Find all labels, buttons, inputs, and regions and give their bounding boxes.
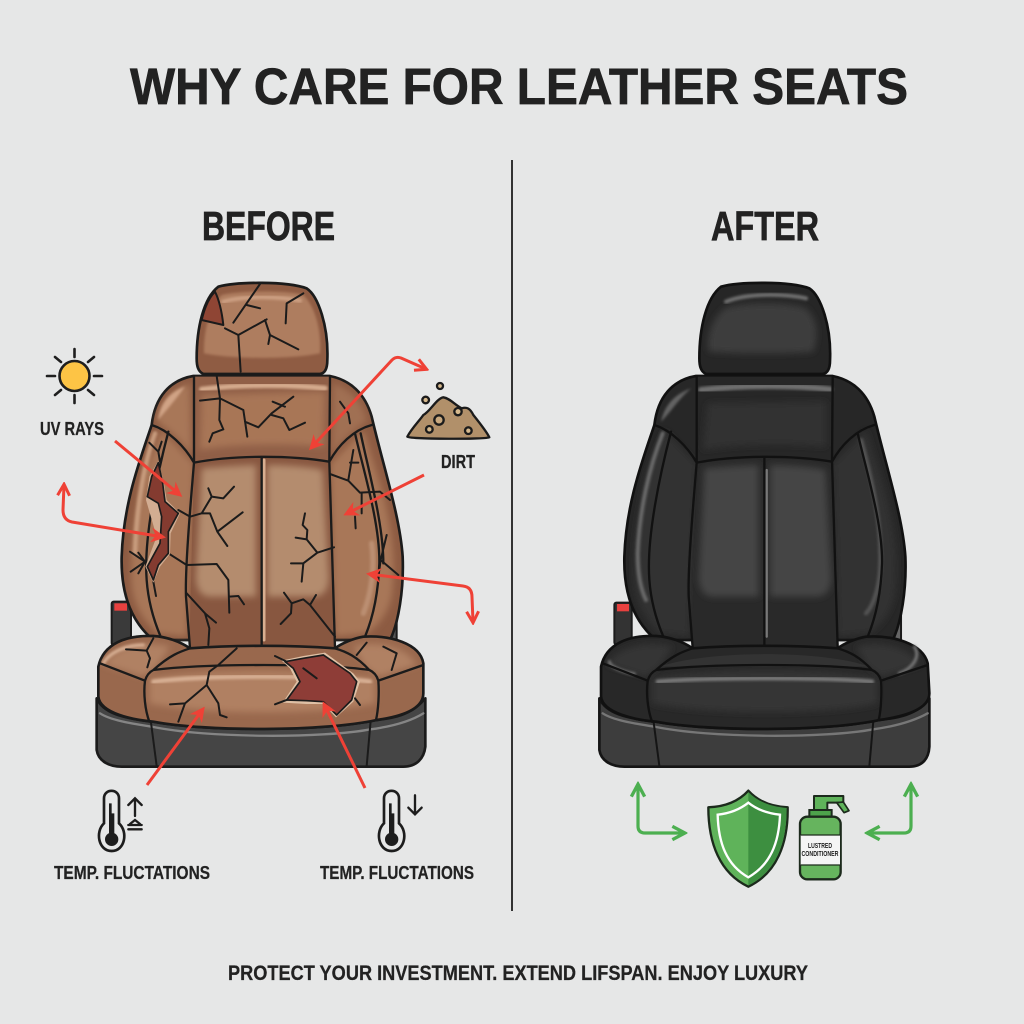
base [599,698,929,767]
backrest [624,376,906,648]
seat tear [282,653,360,717]
arrow: right [868,785,911,833]
restored black leather seat [599,283,929,767]
icon: conditioner bottle [800,796,849,879]
icon: conditioner bottle: CONDITIONER [801,851,838,858]
buckle [614,603,632,644]
side tear [145,461,180,583]
arrow: to dirt from top panel [311,357,426,448]
headrest [197,283,327,374]
label: dirt: DIRT [441,452,475,472]
damaged brown leather seat [97,283,425,767]
green protection arrows [638,785,911,833]
base [97,698,425,767]
cushion [601,636,929,729]
arrow: left [638,785,684,833]
arrow: cold to cushion [147,709,203,785]
icon: thermometer falling [379,791,422,851]
label: temperature left: TEMP. FLUCTATIONS [54,863,210,883]
arrow: heat to tear [324,704,365,788]
red damage arrows [63,357,473,788]
cushion [98,636,423,729]
label: uv rays: UV RAYS [40,419,104,439]
crack network [130,376,398,645]
arrow: dirt to bolster [346,475,424,514]
headrest [699,283,830,374]
arrow: right bolster down [369,574,473,622]
heading: before: BEFORE [202,203,335,249]
icon: thermometer rising [99,791,142,851]
label: temperature right: TEMP. FLUCTATIONS [320,863,474,883]
backrest [122,376,403,648]
title: WHY CARE FOR LEATHER SEATS [130,58,908,115]
buckle [112,602,131,645]
arrow: uv to bolster [115,441,180,495]
footer tagline: PROTECT YOUR INVESTMENT. EXTEND LIFSPAN. ENJOY LUXURY [228,962,808,985]
arrow: tear to left [63,485,163,537]
bottle label text: LUSTRED [808,843,832,850]
icon: sun [47,349,102,403]
heading: after: AFTER [711,203,819,249]
icon: shield [708,791,788,887]
icon: dirt pile [407,383,489,439]
